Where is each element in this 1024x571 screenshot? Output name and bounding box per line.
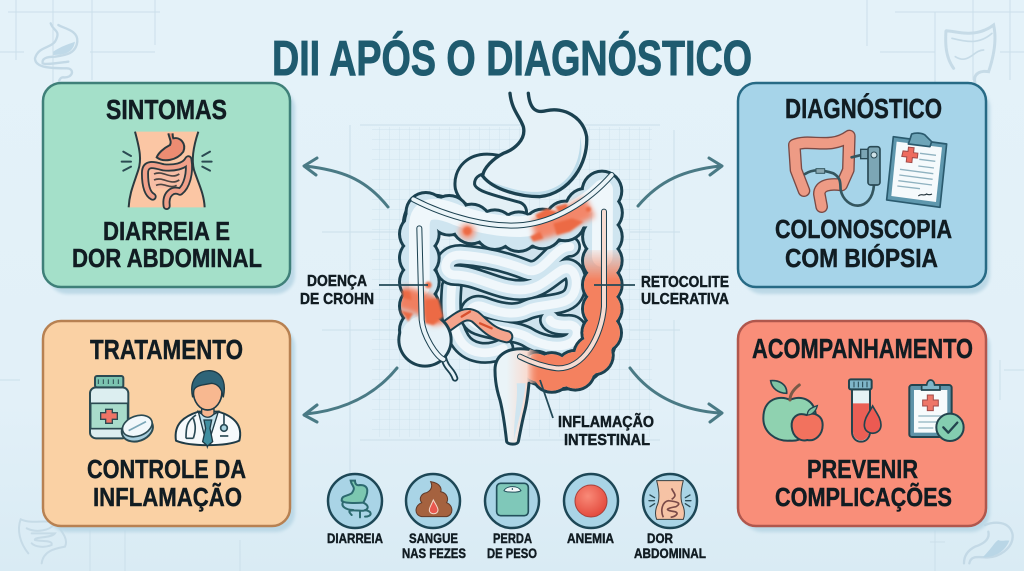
label: dor abdominal <box>634 530 706 561</box>
small intestine <box>443 247 580 353</box>
label: diarreia: DIARREIA <box>327 530 383 546</box>
label: retocolite ulcerativa: RETOCOLITE <box>641 274 729 291</box>
terminal ileum inflamed <box>443 312 507 337</box>
icon: blood test tube <box>849 379 881 442</box>
icon: clipboard with check <box>909 380 964 441</box>
text: controle da inflamação: INFLAMAÇÃO <box>93 482 242 512</box>
duodenum <box>465 164 517 212</box>
icon: abdomen <box>649 481 691 519</box>
arrow: to sintomas <box>304 158 388 207</box>
stomach <box>483 93 587 197</box>
icon: apples <box>763 381 823 441</box>
label: doença de crohn: DOENÇA <box>307 273 367 290</box>
label: doença de crohn <box>300 273 428 308</box>
panel: sintomas <box>43 83 295 294</box>
label: perda de peso: DE PESO <box>487 545 537 561</box>
text: prevenir complicações: COMPLICAÇÕES <box>775 482 952 512</box>
label: inflamação intestinal: INFLAMAÇÃO <box>558 413 654 431</box>
decorative icon: stomach bottom right <box>964 523 1013 563</box>
icon: abdomen with intestines <box>122 132 212 207</box>
label: doença de crohn: DE CROHN <box>300 291 374 308</box>
label: inflamação intestinal <box>540 380 654 449</box>
icon: medicine bottle and pill <box>90 376 156 446</box>
rectum <box>495 349 543 444</box>
icon: digestive tract <box>342 481 371 517</box>
heading: sintomas: SINTOMAS <box>106 94 227 125</box>
label: sangue nas fezes: SANGUE <box>409 530 458 546</box>
text: controle da inflamação: CONTROLE DA <box>87 454 246 484</box>
label: retocolite ulcerativa <box>594 274 729 308</box>
central diagram: digestive tract <box>397 93 612 444</box>
colon taenia lines <box>413 175 612 368</box>
icon: stool with blood drop <box>416 482 452 517</box>
text: colonoscopia com biópsia: COLONOSCOPIA <box>775 214 952 244</box>
label: dor abdominal: ABDOMINAL <box>634 545 706 561</box>
text: prevenir complicações: PREVENIR <box>807 454 918 484</box>
text: diarreia e dor abdominal: DIARREIA E <box>103 216 230 246</box>
text: diarreia e dor abdominal: DOR ABDOMINAL <box>72 243 262 273</box>
label: anemia: ANEMIA <box>567 530 614 546</box>
panel: diagnóstico <box>738 83 990 294</box>
arrow: to acompanhamento <box>630 368 722 422</box>
symptom: perda de peso <box>485 474 539 561</box>
heading: tratamento: TRATAMENTO <box>90 334 243 365</box>
symptom: dor abdominal <box>634 474 706 561</box>
inflammation patches <box>400 207 602 375</box>
arrow: to diagnóstico <box>638 158 722 206</box>
arrow: to tratamento <box>304 368 397 422</box>
decorative icon: colon top right <box>946 25 995 88</box>
panel: acompanhamento <box>738 321 990 532</box>
text: diarreia e dor abdominal <box>72 216 262 273</box>
icon: doctor <box>176 371 240 447</box>
symptom: diarreia <box>327 474 383 546</box>
icon: weighing scale <box>497 483 528 516</box>
title: DII APÓS O DIAGNÓSTICO <box>272 31 752 86</box>
text: colonoscopia com biópsia: COM BIÓPSIA <box>785 243 938 273</box>
label: dor abdominal: DOR <box>647 530 673 546</box>
label: perda de peso <box>487 530 537 561</box>
appendix <box>443 357 455 378</box>
text: controle da inflamação <box>87 454 246 512</box>
label: sangue nas fezes: NAS FEZES <box>402 545 466 561</box>
label: retocolite ulcerativa: ULCERATIVA <box>641 291 729 308</box>
label: perda de peso: PERDA <box>493 530 532 546</box>
inflammation blotches <box>400 203 591 325</box>
icon: colonoscope and colon <box>794 133 947 207</box>
icon: red blood cell <box>575 485 607 517</box>
decorative icon: stomach top left <box>35 23 77 87</box>
panel: tratamento <box>43 321 295 532</box>
decorative icon: colon bottom left <box>19 519 66 563</box>
label: sangue nas fezes <box>402 530 466 561</box>
symptom: sangue nas fezes <box>402 474 466 561</box>
text: prevenir complicações <box>775 454 952 512</box>
text: colonoscopia com biópsia <box>775 214 952 273</box>
heading: diagnóstico: DIAGNÓSTICO <box>785 93 942 124</box>
symptom: anemia <box>564 474 618 546</box>
colon <box>397 190 603 373</box>
label: inflamação intestinal: INTESTINAL <box>564 432 650 449</box>
